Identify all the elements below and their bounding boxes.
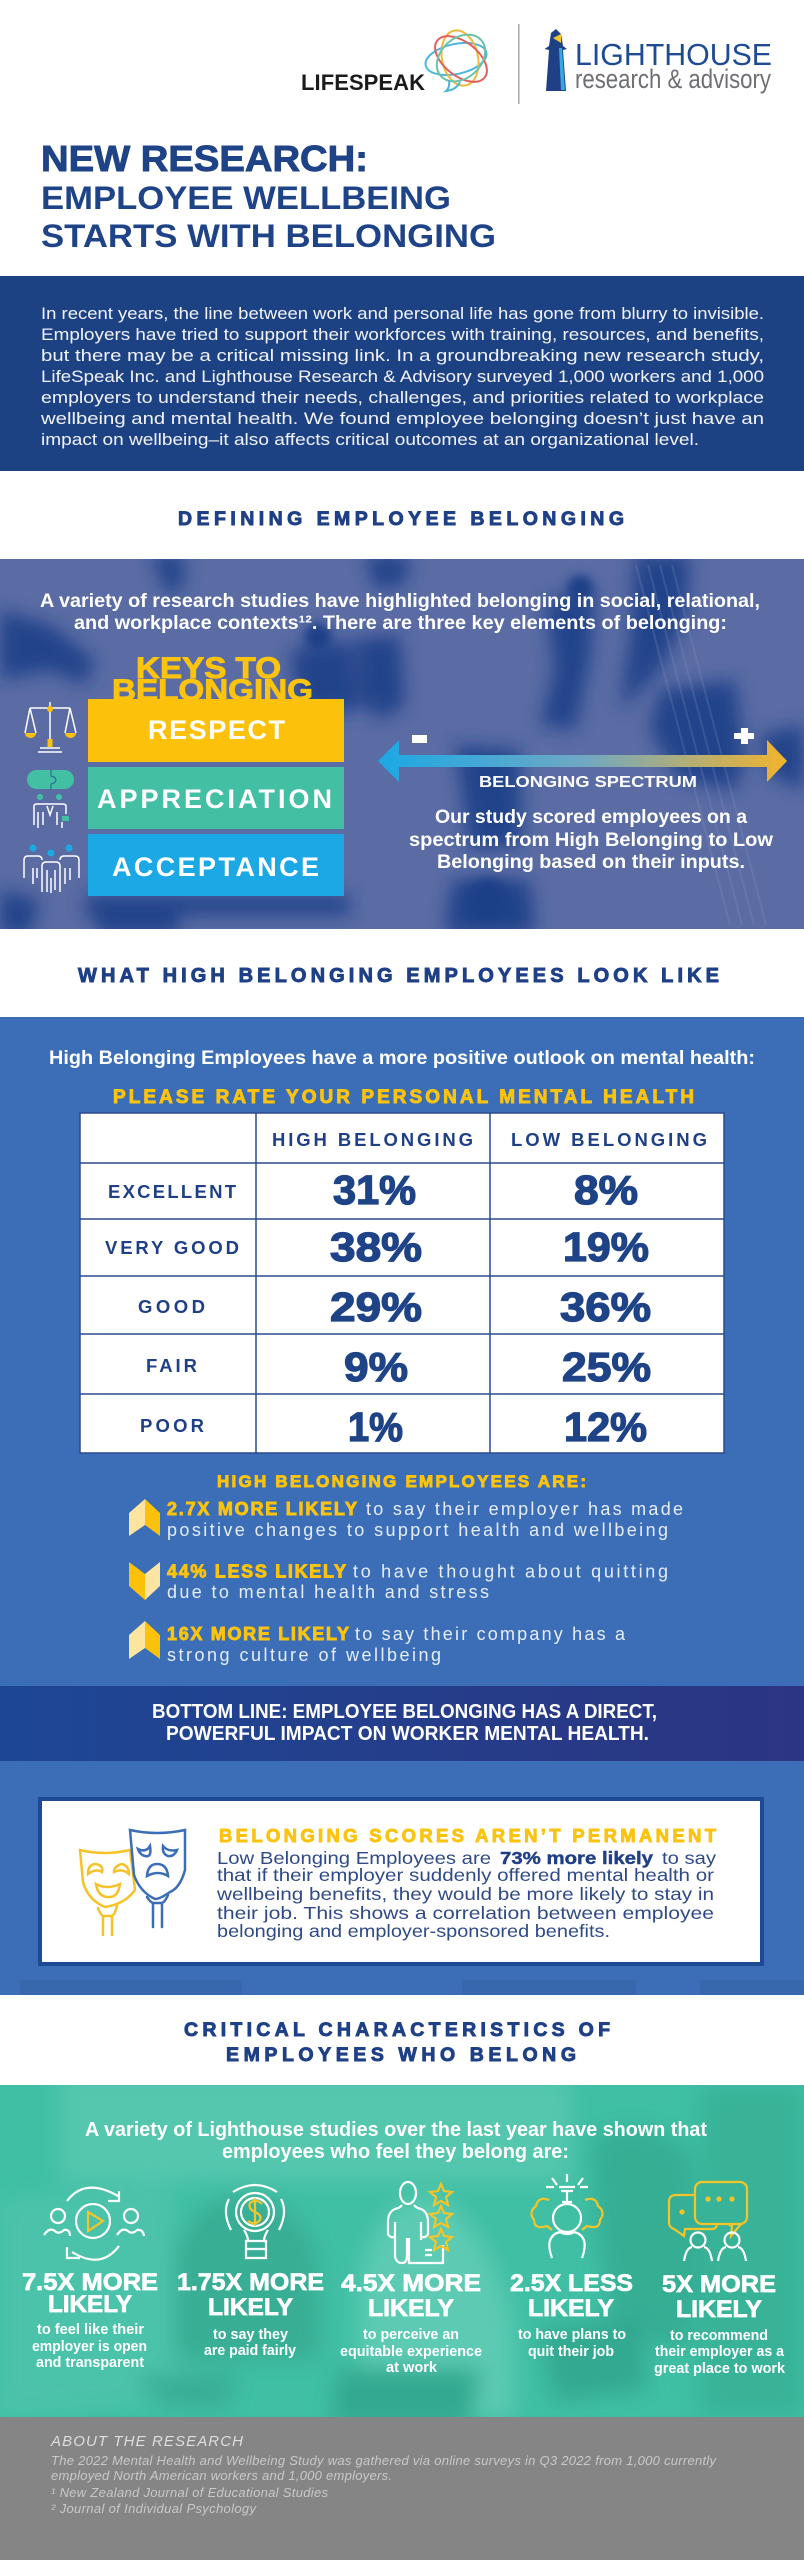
callout heading: BELONGING SCORES AREN’T PERMANENT xyxy=(219,1825,717,1846)
stat: 44% less likely xyxy=(129,1562,668,1602)
stat description xyxy=(340,2327,482,2376)
heading: critical characteristics: CRITICAL CHARACTERISTICS OF xyxy=(184,2019,610,2041)
stat: 16x more likely xyxy=(129,1621,626,1665)
stat: 2.7x more likely xyxy=(129,1499,683,1540)
title xyxy=(41,138,496,254)
intro paragraph xyxy=(40,304,764,449)
table values: 38% xyxy=(330,1224,422,1270)
about text and footnotes: The 2022 Mental Health and Wellbeing Study was gathered via online surveys in Q3 2022 from 1,000 currently xyxy=(51,2453,718,2468)
column: paid fairly xyxy=(177,2185,324,2359)
stat headline: 2.5X LESS xyxy=(510,2270,633,2297)
stat headline: LIKELY xyxy=(676,2296,762,2323)
table values: 29% xyxy=(330,1284,422,1330)
stat headline xyxy=(510,2270,633,2322)
stat description: quit their job xyxy=(528,2344,614,2360)
divider xyxy=(518,24,520,104)
table values: 31% xyxy=(333,1167,416,1213)
table headers xyxy=(272,1129,707,1150)
icon: transparency cycle xyxy=(44,2188,144,2260)
bottom line banner: POWERFUL IMPACT ON WORKER MENTAL HEALTH. xyxy=(166,1722,649,1745)
about text and footnotes: ¹ New Zealand Journal of Educational Studies xyxy=(51,2485,328,2500)
stat: 16x more likely: to say their company has a xyxy=(355,1624,626,1644)
stat description: are paid fairly xyxy=(204,2343,296,2359)
callout body: wellbeing benefits, they would be more likely to stay in xyxy=(216,1884,714,1904)
row labels: POOR xyxy=(140,1415,204,1436)
stat headline: 1.75X MORE xyxy=(177,2269,324,2296)
stat description xyxy=(32,2322,147,2371)
stat headline xyxy=(22,2269,158,2318)
subheading: high belonging employees are: HIGH BELONGING EMPLOYEES ARE: xyxy=(217,1472,586,1491)
table values: 8% xyxy=(574,1167,638,1213)
stat headline xyxy=(341,2270,481,2322)
column: open and transparent xyxy=(22,2188,158,2371)
stat description: to feel like their xyxy=(37,2322,144,2338)
callout body: their job. This shows a correlation between employee xyxy=(217,1903,714,1923)
stat: 44% less likely: 44% LESS LIKELY xyxy=(167,1562,346,1582)
stat headline: LIKELY xyxy=(528,2295,614,2322)
icon: stressed head xyxy=(531,2174,603,2258)
stat: 2.7x more likely: to say their employer has made xyxy=(366,1499,683,1519)
stat description: employer is open xyxy=(32,2339,147,2355)
row labels: EXCELLENT xyxy=(108,1181,237,1202)
table values xyxy=(330,1167,651,1450)
Lighthouse Research logo: LIGHTHOUSE xyxy=(575,37,772,72)
callout card xyxy=(40,1799,762,1964)
stat: 16x more likely: 16X MORE LIKELY xyxy=(167,1624,349,1644)
heading: critical characteristics xyxy=(184,2019,610,2066)
bottom line banner xyxy=(0,1686,804,1761)
key: respect xyxy=(88,699,344,762)
icon: theatre masks xyxy=(80,1830,185,1935)
stat description: to have plans to xyxy=(518,2327,626,2343)
intro paragraph: LifeSpeak Inc. and Lighthouse Research & Advisory surveyed 1,000 workers and 1,000 xyxy=(41,367,764,386)
plus sign xyxy=(734,728,754,744)
callout body: to say xyxy=(662,1848,716,1868)
intro text: A variety of research studies have highlighted belonging in social, relational, xyxy=(40,591,760,612)
Lighthouse Research logo xyxy=(544,29,772,94)
panel: defining belonging xyxy=(0,555,804,935)
intro paragraph: but there may be a critical missing link. In a groundbreaking new research study, xyxy=(41,346,764,365)
icon: money bulb xyxy=(226,2185,284,2258)
stat description xyxy=(518,2327,626,2360)
spectrum description: Belonging based on their inputs. xyxy=(437,852,745,873)
stat description xyxy=(654,2328,786,2377)
crowd photo background xyxy=(0,555,804,935)
key: acceptance: ACCEPTANCE xyxy=(112,852,319,882)
intro text: employees who feel they belong are: xyxy=(222,2140,569,2163)
panel: intro xyxy=(0,276,804,471)
table values: 12% xyxy=(564,1404,647,1450)
stat description: to perceive an xyxy=(363,2327,459,2343)
stat description: their employer as a xyxy=(655,2344,785,2360)
table headers: HIGH BELONGING xyxy=(272,1129,473,1150)
callout body: Low Belonging Employees are xyxy=(217,1848,491,1868)
faint photo bleed at panel bottom xyxy=(20,1980,804,1995)
bottom line banner: BOTTOM LINE: EMPLOYEE BELONGING HAS A DIRECT, xyxy=(152,1700,657,1723)
title: EMPLOYEE WELLBEING xyxy=(41,180,451,216)
stat headline: 5X MORE xyxy=(662,2271,776,2298)
office photo background xyxy=(0,2075,804,2425)
stat description: equitable experience xyxy=(340,2344,482,2360)
icon: speech bubbles and people xyxy=(669,2182,747,2261)
intro paragraph: wellbeing and mental health. We found employee belonging doesn’t just have an xyxy=(40,409,764,428)
column: equitable experience xyxy=(340,2182,482,2376)
stat headline: LIKELY xyxy=(48,2291,132,2318)
about text and footnotes xyxy=(51,2453,718,2516)
intro paragraph: Employers have tried to support their workforces with training, resources, and benefits, xyxy=(41,325,764,344)
spectrum description xyxy=(409,807,773,873)
key: appreciation: APPRECIATION xyxy=(97,784,332,814)
table values: 9% xyxy=(344,1344,408,1390)
table title: PLEASE RATE YOUR PERSONAL MENTAL HEALTH xyxy=(113,1087,694,1108)
stat headline xyxy=(177,2269,324,2321)
outlook sentence: High Belonging Employees have a more positive outlook on mental health: xyxy=(49,1048,755,1069)
callout body xyxy=(216,1848,716,1941)
table values: 19% xyxy=(563,1224,649,1270)
panel: high belonging xyxy=(0,1017,804,1995)
row labels: FAIR xyxy=(146,1355,197,1376)
stat: 44% less likely: due to mental health and stress xyxy=(167,1582,489,1602)
key: respect: RESPECT xyxy=(148,715,286,745)
minus sign xyxy=(412,735,427,743)
stat headline: 4.5X MORE xyxy=(341,2270,481,2297)
about heading: ABOUT THE RESEARCH xyxy=(50,2433,243,2450)
table values: 36% xyxy=(560,1284,651,1330)
heading: defining belonging: DEFINING EMPLOYEE BELONGING xyxy=(178,508,624,530)
stat: 16x more likely: strong culture of wellbeing xyxy=(167,1645,441,1665)
callout body: 73% more likely xyxy=(500,1848,653,1868)
callout body: belonging and employer-sponsored benefits. xyxy=(217,1921,610,1941)
spectrum label: BELONGING SPECTRUM xyxy=(479,774,697,791)
heading: critical characteristics: EMPLOYEES WHO BELONG xyxy=(226,2044,576,2066)
icon: up arrow xyxy=(129,1499,160,1536)
stat: 2.7x more likely: 2.7X MORE LIKELY xyxy=(167,1499,357,1519)
key: acceptance xyxy=(88,834,344,896)
stat headline: LIKELY xyxy=(368,2295,454,2322)
stat description: great place to work xyxy=(654,2361,786,2377)
icon: scales xyxy=(25,702,76,752)
spectrum description: spectrum from High Belonging to Low xyxy=(409,830,773,851)
stat: 44% less likely: to have thought about quitting xyxy=(353,1562,668,1582)
intro paragraph: In recent years, the line between work and personal life has gone from blurry to invisible. xyxy=(41,304,764,323)
column: recommend employer xyxy=(654,2182,786,2377)
callout body: that if their employer suddenly offered mental health or xyxy=(217,1865,714,1885)
icon: down arrow xyxy=(129,1562,160,1600)
intro text: and workplace contexts¹². There are three key elements of belonging: xyxy=(74,613,727,634)
key: appreciation xyxy=(88,767,344,829)
stat description: and transparent xyxy=(36,2355,144,2371)
stat headline: LIKELY xyxy=(208,2294,293,2321)
spectrum description: Our study scored employees on a xyxy=(435,807,747,828)
stat description xyxy=(204,2327,296,2359)
stat headline: 7.5X MORE xyxy=(22,2269,158,2296)
table headers: LOW BELONGING xyxy=(511,1129,707,1150)
intro paragraph: employers to understand their needs, challenges, and priorities related to workplace xyxy=(41,388,764,407)
intro text xyxy=(40,591,760,634)
logos header xyxy=(301,24,772,104)
table: mental health ratings xyxy=(80,1113,724,1453)
stat headline xyxy=(662,2271,776,2323)
icon: group of people xyxy=(24,844,79,893)
title: NEW RESEARCH: xyxy=(41,138,368,179)
panel: critical characteristics xyxy=(0,2075,804,2425)
keys to belonging heading: BELONGING xyxy=(112,674,313,707)
LifeSpeak logo: LIFESPEAK xyxy=(301,70,425,95)
stat description: to recommend xyxy=(670,2328,768,2344)
intro text xyxy=(85,2118,707,2163)
icon: puzzle and people xyxy=(27,770,74,828)
column: plans to quit xyxy=(510,2174,633,2360)
stat description: at work xyxy=(386,2360,438,2376)
row labels: GOOD xyxy=(138,1296,205,1317)
intro text: A variety of Lighthouse studies over the last year have shown that xyxy=(85,2118,707,2141)
title: STARTS WITH BELONGING xyxy=(41,218,496,254)
about text and footnotes: ² Journal of Individual Psychology xyxy=(51,2501,258,2516)
table values: 25% xyxy=(562,1344,651,1390)
about text and footnotes: employed North American workers and 1,000 employers. xyxy=(51,2468,392,2483)
icon: up arrow xyxy=(129,1621,160,1659)
LifeSpeak logo xyxy=(301,25,495,95)
table values: 1% xyxy=(348,1404,403,1450)
row labels xyxy=(105,1181,239,1436)
keys to belonging heading xyxy=(114,656,312,699)
row labels: VERY GOOD xyxy=(105,1237,239,1258)
spectrum arrow xyxy=(378,728,787,782)
stat description: to say they xyxy=(213,2327,288,2343)
panel: about the research xyxy=(0,2417,804,2560)
stat: 2.7x more likely: positive changes to support health and wellbeing xyxy=(167,1520,668,1540)
keys to belonging heading: KEYS TO xyxy=(136,652,281,685)
icon: person with stars xyxy=(388,2182,452,2263)
intro paragraph: impact on wellbeing–it also affects critical outcomes at an organizational level. xyxy=(41,430,699,449)
heading: high belonging: WHAT HIGH BELONGING EMPLOYEES LOOK LIKE xyxy=(78,965,719,987)
